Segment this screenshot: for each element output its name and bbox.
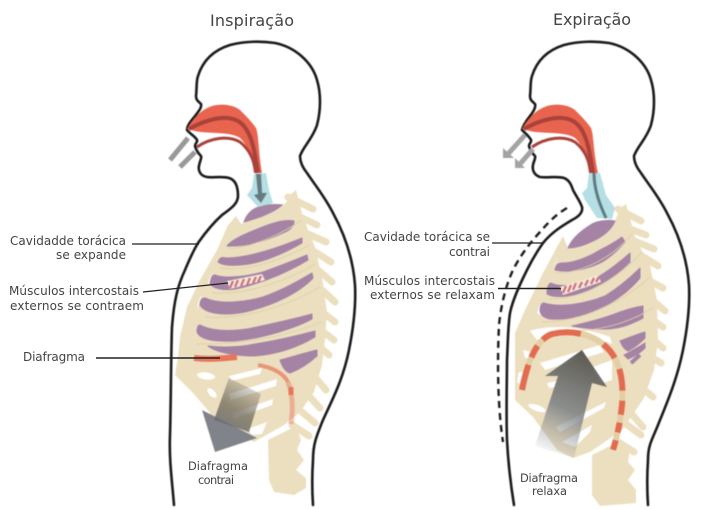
label: Diafragma relaxa: relaxa — [532, 484, 567, 498]
label: Diafragma: Diafragma — [23, 350, 85, 364]
label: Cavidade torácica se contrai — [364, 230, 543, 259]
label: Músculos intercostais externos se relaxam: Músculos intercostais — [364, 274, 495, 288]
spinal processes — [618, 209, 665, 452]
intercostal muscles — [227, 274, 265, 289]
panel: expiration figure — [498, 42, 689, 506]
air in — [170, 138, 195, 167]
lungs — [540, 220, 645, 363]
dashed chest line — [498, 208, 567, 442]
white gaps — [197, 272, 277, 435]
airway — [187, 105, 262, 173]
ribcage — [175, 190, 335, 495]
body outline — [170, 42, 355, 505]
label: Músculos intercostais externos se contraem — [9, 283, 228, 313]
arrow: air to lungs — [254, 174, 267, 203]
airway — [522, 105, 598, 173]
label: Diafragma contrai: contrai — [198, 473, 234, 487]
diaphragm — [522, 332, 622, 450]
rib edges — [542, 234, 654, 331]
label: Diafragma relaxa: Diafragma — [520, 471, 578, 485]
title: Expiração: Expiração — [553, 10, 631, 29]
diaphragm — [194, 357, 292, 424]
body outline — [507, 42, 689, 505]
label: Músculos intercostais externos se relaxam: externos se relaxam — [370, 288, 495, 302]
label: Músculos intercostais externos se relaxam — [364, 274, 561, 302]
white gaps — [517, 255, 612, 447]
lungs — [197, 205, 317, 373]
air out — [503, 135, 533, 168]
panel: inspiration figure — [170, 42, 355, 505]
label: Cavidade torácica se contrai: Cavidade torácica se — [364, 230, 490, 244]
label: Diafragma relaxa — [520, 471, 578, 498]
label: Músculos intercostais externos se contraem: Músculos intercostais — [9, 284, 139, 298]
spinal processes — [288, 197, 335, 436]
intercostal muscles — [560, 275, 601, 295]
label: Músculos intercostais externos se contraem: externos se contraem — [10, 299, 144, 313]
trachea — [582, 173, 615, 219]
trachea — [247, 173, 273, 207]
label: Cavidade torácica se contrai: contrai — [449, 245, 490, 259]
title: Inspiração: Inspiração — [210, 11, 294, 30]
rib edges — [197, 220, 322, 344]
ribcage — [515, 204, 665, 506]
label: Cavidadde torácica se expande — [10, 234, 199, 262]
label: Cavidadde torácica se expande: se expande — [56, 248, 126, 262]
arrow: diaphragm contracts — [202, 378, 261, 452]
label: Diafragma contrai — [188, 459, 248, 487]
label: Diafragma contrai: Diafragma — [188, 459, 248, 473]
label: Cavidadde torácica se expande: Cavidadde torácica — [10, 234, 126, 248]
arrow: diaphragm relaxes — [535, 350, 607, 458]
